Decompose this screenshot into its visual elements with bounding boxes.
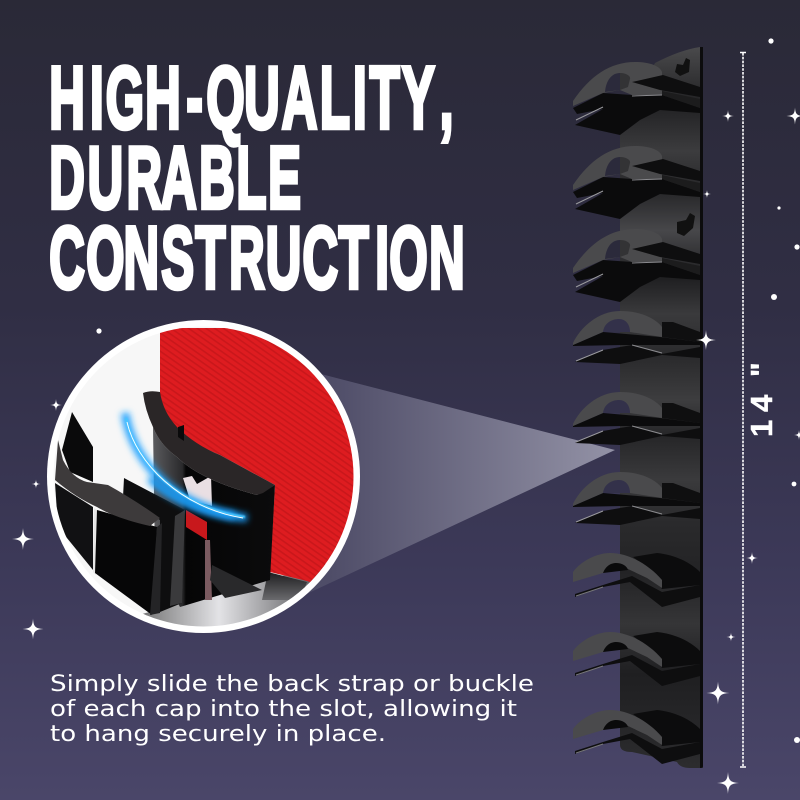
left bracket top surface	[55, 440, 160, 526]
hook 7	[573, 553, 700, 607]
glossy base reflection	[210, 565, 262, 598]
body text: to hang securely in place.	[50, 722, 386, 747]
hook 8	[573, 632, 700, 686]
hook 5	[573, 392, 700, 445]
main bracket top surface	[143, 391, 275, 495]
title: DURABLE	[49, 129, 301, 228]
body text: Simply slide the back strap or buckle	[50, 672, 534, 697]
hook 4	[573, 311, 700, 364]
title	[49, 49, 465, 308]
left bracket glossy plate	[95, 510, 157, 615]
dimension line	[740, 52, 746, 767]
hook 3	[573, 229, 700, 302]
hook 9	[573, 710, 700, 764]
spotlight beam	[290, 366, 615, 597]
keyhole middle	[677, 213, 695, 236]
blue motion arc glow	[125, 413, 247, 518]
blue motion arc core	[127, 422, 243, 518]
floor	[142, 564, 326, 626]
body text: of each cap into the slot, allowing it	[50, 697, 517, 722]
floor shadow	[262, 572, 307, 600]
left bracket upper plate	[62, 412, 93, 482]
red reflection	[186, 510, 207, 540]
glare reflection	[183, 476, 212, 506]
left bracket lower plate	[55, 483, 93, 570]
hook 2	[573, 146, 700, 219]
hook 1	[573, 62, 700, 135]
dimension label: 1 4 "	[744, 362, 779, 437]
lower reflection	[205, 540, 212, 600]
zoom circle: close-up of cap in bracket	[47, 320, 362, 640]
title: HIGH-QUALITY,	[49, 49, 453, 148]
hook 6	[573, 472, 700, 525]
keyhole top	[675, 58, 690, 76]
wall rack panel	[620, 47, 703, 768]
red cap	[160, 328, 354, 582]
gap highlight	[93, 508, 97, 575]
main bracket glossy face	[153, 427, 275, 607]
slot notch	[178, 425, 184, 441]
title: CONSTRUCTION	[49, 209, 465, 308]
rack edge	[700, 47, 703, 768]
front bracket plate	[123, 478, 185, 612]
body text	[50, 672, 534, 747]
